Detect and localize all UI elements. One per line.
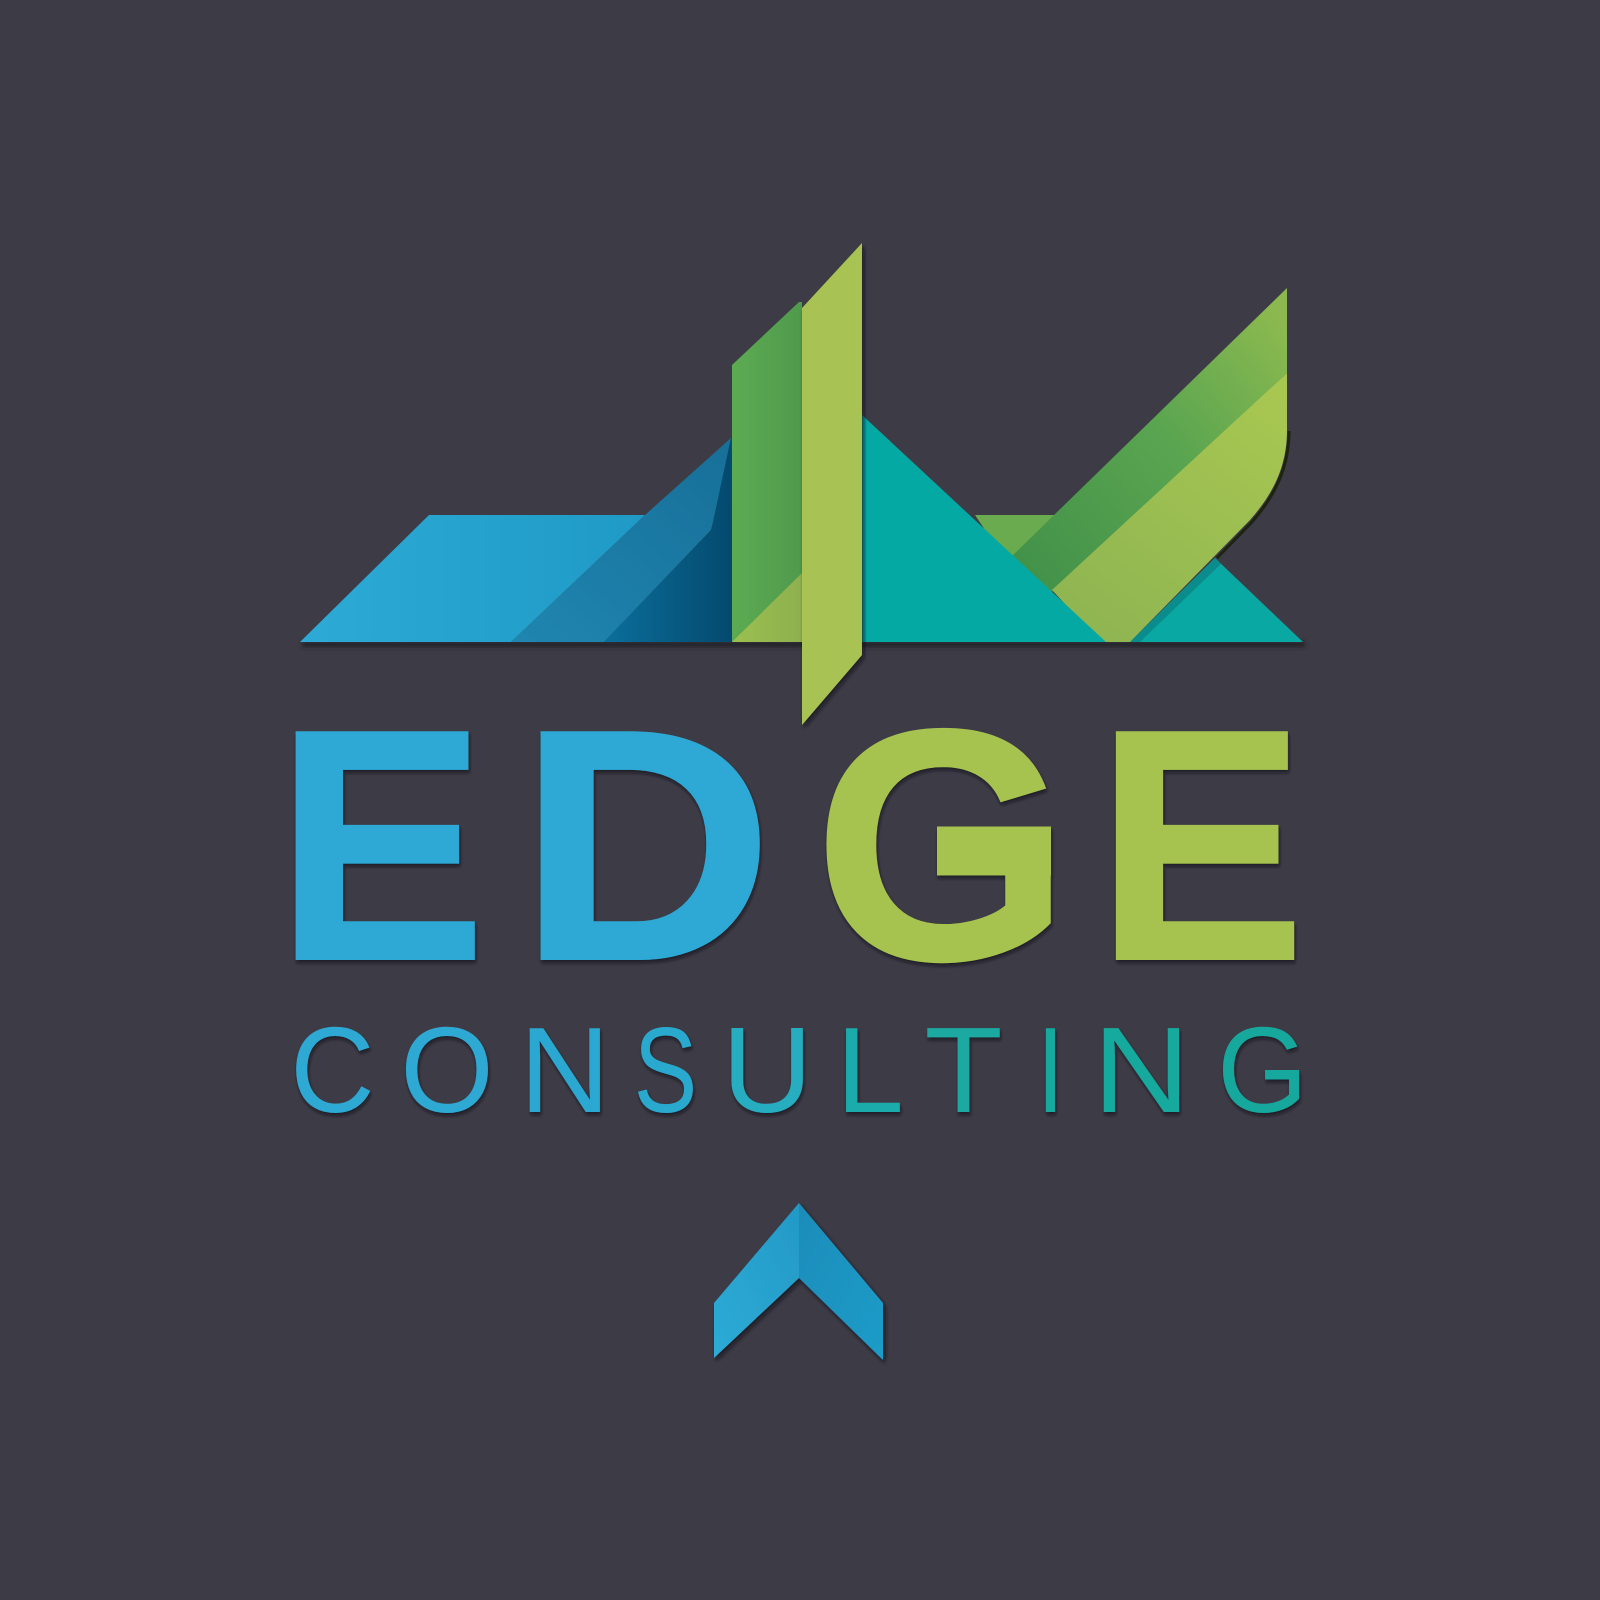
wordmark: CONSULTING: U [722,1003,813,1139]
wordmark: CONSULTING: S [634,1003,697,1139]
lime vertical blade [802,243,862,725]
wordmark: CONSULTING: L [836,1002,904,1138]
wordmark: EDGE [275,661,1305,1030]
letter E: E [275,662,486,1029]
leaf shape [1012,288,1289,642]
icon: upward chevron [714,1203,883,1360]
wordmark: CONSULTING: N [519,1003,610,1139]
right teal triangle [1130,558,1303,642]
wordmark: CONSULTING: C [290,1003,375,1139]
base shadow line [302,642,1305,647]
blue mountain plateau [300,438,733,642]
logo mark: folded mountains and leaf [300,243,1305,725]
green plateau behind teal peak [975,515,1056,560]
wordmark: CONSULTING: O [400,1001,494,1138]
wordmark: CONSULTING [290,1001,1308,1139]
teal shadow strip under leaf [1130,558,1221,642]
wordmark: CONSULTING: T [924,1002,1003,1138]
wordmark: CONSULTING: I [1037,1003,1064,1139]
letter E: E [1096,661,1305,1030]
G crossbar [937,826,1051,876]
letter G: G [814,661,1070,1029]
green vertical fold [732,302,802,642]
wordmark: CONSULTING: G [1217,1003,1308,1139]
wordmark: CONSULTING: N [1093,1003,1190,1139]
letter D: D [518,661,774,1029]
teal central peak [862,415,1106,642]
